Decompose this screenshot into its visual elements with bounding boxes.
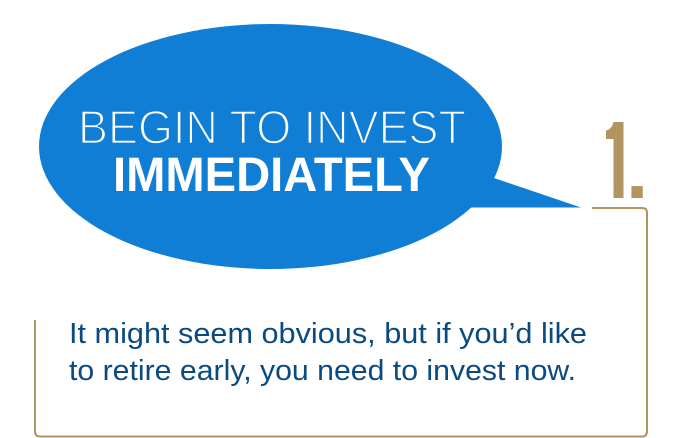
heading line 1: BEGIN TO INVEST [78, 100, 466, 154]
bubble tail [468, 170, 581, 208]
speech bubble [39, 24, 581, 269]
numeral body [606, 122, 624, 198]
body line 1: It might seem obvious, but if you’d like [69, 318, 587, 350]
step number [606, 122, 643, 198]
heading [78, 100, 466, 202]
numeral one: 1 [599, 104, 635, 221]
panel: gold outline box [35, 208, 647, 436]
heading line 2: IMMEDIATELY [113, 149, 430, 202]
body text [69, 318, 587, 387]
bubble ellipse [39, 24, 502, 269]
body line 2: to retire early, you need to invest now. [69, 355, 576, 387]
numeral period: . [626, 126, 648, 215]
